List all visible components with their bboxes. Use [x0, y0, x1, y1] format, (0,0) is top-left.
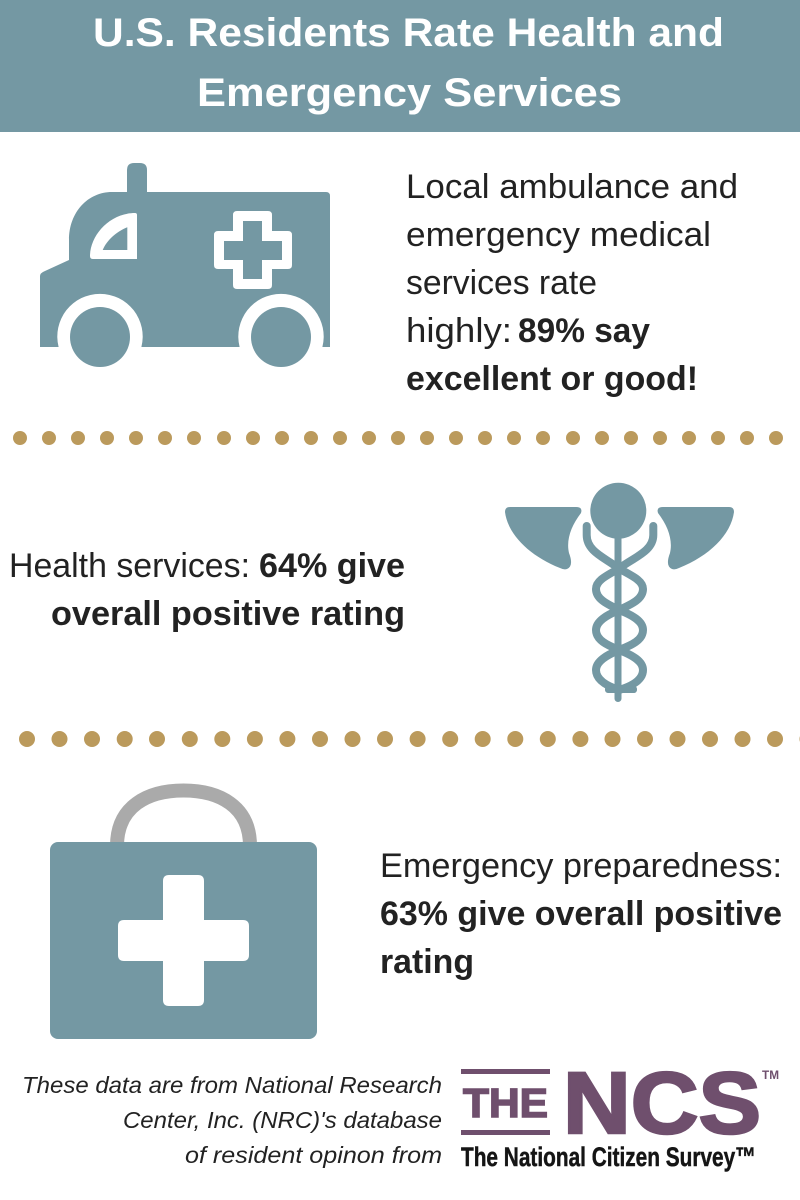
dotted divider two: [19, 731, 800, 747]
title banner: Emergency Services: [197, 71, 622, 115]
title banner: U.S. Residents Rate Health and: [93, 11, 724, 55]
text: ambulance rating: excellent or good!: [406, 360, 698, 398]
logo: The NCS: TM: [762, 1068, 779, 1082]
text: health services rating: 64% give: [259, 547, 405, 585]
text: emergency preparedness rating: 63% give overall positive: [380, 895, 782, 933]
text: emergency preparedness rating: [380, 847, 782, 981]
text: health services rating: overall positive rating: [51, 595, 405, 633]
text: source note: These data are from National Research: [22, 1072, 442, 1098]
logo: The NCS: [461, 1055, 779, 1172]
text: source note: [22, 1072, 442, 1168]
icon: first aid kit: [50, 790, 317, 1039]
text: ambulance rating: 89% say: [518, 312, 650, 350]
text: source note: Center, Inc. (NRC)'s database: [123, 1107, 442, 1133]
text: ambulance rating: services rate: [406, 264, 597, 302]
text: ambulance rating: highly:: [406, 312, 512, 350]
text: emergency preparedness rating: Emergency preparedness:: [380, 847, 782, 885]
logo: The NCS: THE: [463, 1080, 548, 1126]
text: emergency preparedness rating: rating: [380, 943, 474, 981]
text: health services rating: Health services:: [9, 547, 250, 585]
icon: caduceus: [505, 483, 734, 702]
text: health services rating: [9, 547, 405, 633]
text: ambulance rating: Local ambulance and: [406, 168, 738, 206]
text: ambulance rating: [406, 168, 738, 398]
logo: The NCS: NCS: [563, 1055, 761, 1152]
title banner: [0, 0, 800, 132]
text: ambulance rating: emergency medical: [406, 216, 711, 254]
text: source note: of resident opinon from: [185, 1142, 442, 1168]
icon: ambulance: [40, 163, 330, 367]
dotted divider one: [13, 431, 783, 445]
